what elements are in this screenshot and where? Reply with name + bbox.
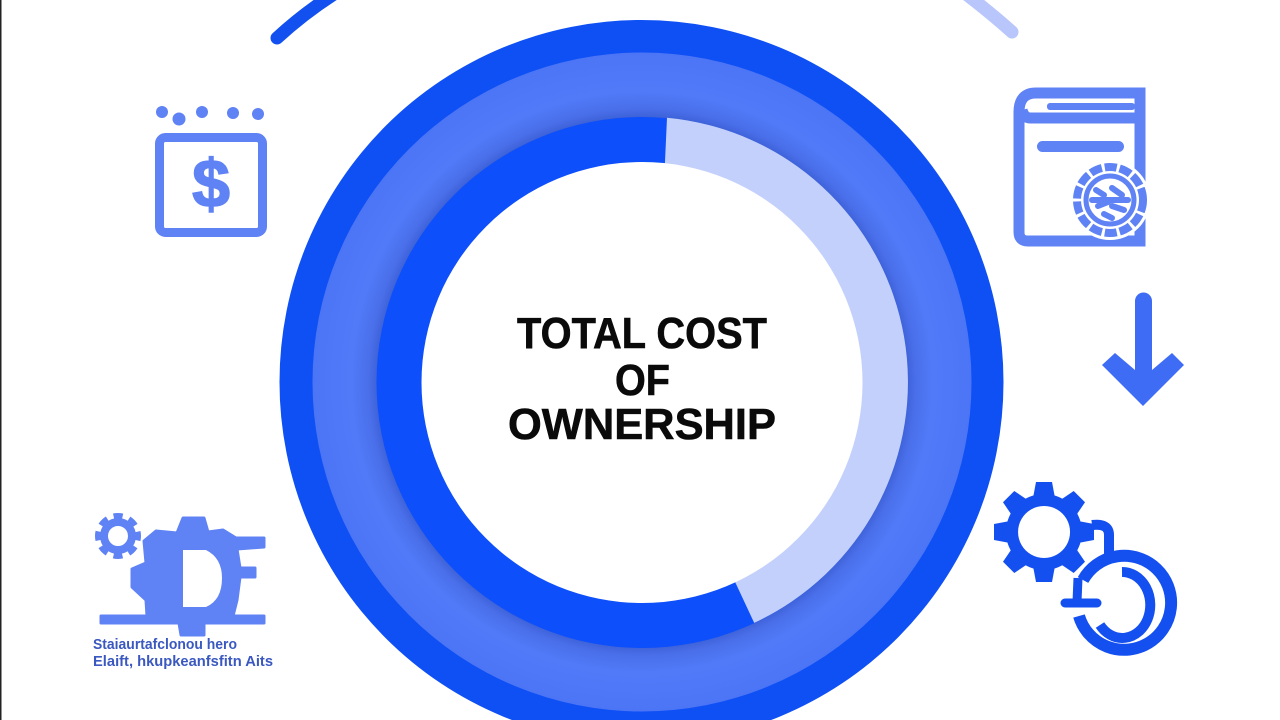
center hole xyxy=(422,162,862,603)
small gear xyxy=(98,516,138,556)
caption: icon text xyxy=(93,637,273,670)
arc: top left dark segment xyxy=(277,0,334,38)
title: total cost of ownership xyxy=(508,309,776,449)
icon: dollar box with dots: $ xyxy=(192,146,230,222)
middle ring xyxy=(312,52,972,712)
inner ring: dark segment xyxy=(376,117,908,648)
inner ring: light segment xyxy=(665,118,908,623)
icon: gears and circular arrows xyxy=(994,482,1171,650)
icon: down arrow xyxy=(1102,292,1184,406)
icon: dollar box with dots xyxy=(156,106,264,232)
connector and circular arrows xyxy=(1065,525,1171,650)
icon: large gear with small gear xyxy=(98,516,264,635)
outer ring xyxy=(280,20,1004,720)
title: total cost of ownership: OWNERSHIP xyxy=(508,400,776,449)
arc: top right light segment xyxy=(966,0,1012,32)
title: total cost of ownership: TOTAL COST xyxy=(517,309,767,358)
gear xyxy=(994,482,1094,582)
caption: icon text: Elaift, hkupkeanfsfitn Aits xyxy=(93,654,273,670)
title: total cost of ownership: OF xyxy=(615,356,670,405)
icon: book with gear seal xyxy=(1019,93,1150,241)
large gear xyxy=(101,518,264,635)
white D cutout xyxy=(183,550,222,607)
donut chart xyxy=(280,20,1004,720)
caption: icon text: Staiaurtafclonou hero xyxy=(93,637,237,653)
